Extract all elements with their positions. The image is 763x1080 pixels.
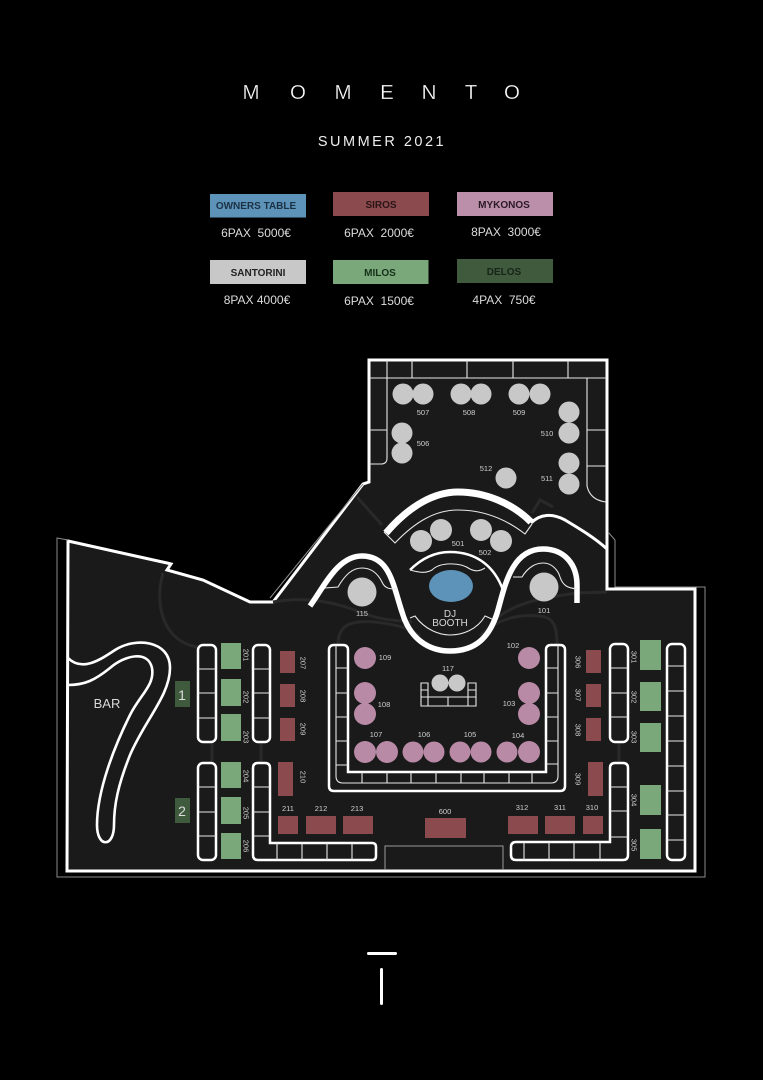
legend: siros: [333, 192, 429, 240]
delos marker 1: [175, 681, 190, 707]
siros table numbers: 209: [298, 723, 308, 735]
siros table numbers: 210: [298, 771, 308, 783]
delos marker 1: 1: [178, 687, 186, 703]
milos table numbers: 303: [630, 731, 638, 743]
siros table numbers: 310: [586, 803, 598, 812]
DJ booth label: BOOTH: [432, 618, 468, 629]
DJ booth label: [432, 609, 468, 629]
santorini table numbers: 115: [356, 609, 368, 618]
milos table numbers: 202: [242, 691, 250, 703]
milos table numbers: 205: [242, 807, 250, 819]
subtitle: SUMMER 2021: [318, 134, 446, 150]
santorini table numbers: 501: [452, 539, 464, 548]
upper room benches: [369, 360, 607, 502]
mykonos table numbers: 108: [378, 700, 390, 709]
booth details: [325, 552, 577, 635]
santorini table numbers: 508: [463, 408, 475, 417]
santorini table numbers: 509: [513, 408, 525, 417]
milos table numbers: 301: [630, 651, 638, 663]
siros table numbers: [282, 656, 598, 816]
sofa 117: [421, 683, 476, 706]
left benches: [198, 645, 376, 860]
siros table numbers: 211: [282, 804, 294, 813]
legend: owners table: [210, 194, 306, 240]
mykonos tables: [354, 647, 540, 763]
icon: logo T: [367, 952, 397, 1005]
entrance: [385, 846, 503, 870]
milos table numbers: [242, 649, 638, 852]
legend: mykonos: MYKONOS: [478, 200, 530, 211]
siros table numbers: 600: [439, 807, 451, 816]
siros table numbers: 208: [298, 690, 308, 702]
santorini table numbers: 510: [541, 429, 553, 438]
milos table numbers: 305: [630, 839, 638, 851]
legend: milos: 6PAX 1500€: [344, 294, 414, 308]
siros table numbers: 213: [351, 804, 363, 813]
mykonos table numbers: 104: [512, 731, 524, 740]
legend: siros: SIROS: [365, 200, 397, 211]
mykonos table numbers: 103: [503, 699, 515, 708]
legend: delos: [457, 259, 553, 307]
siros table numbers: 207: [298, 657, 308, 669]
DJ booth pool: [429, 570, 473, 602]
legend: santorini: SANTORINI: [231, 268, 286, 279]
central U bench: [329, 645, 565, 791]
milos table numbers: 203: [242, 731, 250, 743]
santorini table numbers: 511: [541, 474, 553, 483]
milos tables: [221, 640, 661, 859]
santorini table numbers: 502: [479, 548, 491, 557]
legend: owners table: OWNERS TABLE: [216, 201, 297, 212]
siros table numbers: 307: [574, 689, 582, 701]
legend: siros: 6PAX 2000€: [344, 226, 414, 240]
milos table numbers: 204: [242, 770, 250, 782]
delos marker 2: [175, 798, 190, 823]
floor plan: [57, 360, 705, 877]
mykonos table numbers: 105: [464, 730, 476, 739]
santorini table numbers: 101: [538, 606, 550, 615]
legend: milos: [333, 260, 428, 308]
santorini table numbers: 506: [417, 439, 429, 448]
santorini table numbers: [356, 408, 553, 673]
right benches: [511, 644, 685, 860]
milos table numbers: 302: [630, 691, 638, 703]
DJ booth label: DJ: [444, 609, 456, 620]
legend: mykonos: [457, 192, 553, 239]
legend: mykonos: 8PAX 3000€: [471, 225, 541, 239]
faint floor curves: [160, 497, 619, 762]
curved wall above 501 and 502: [384, 492, 607, 549]
bar counter: [68, 643, 170, 842]
floor outline: [67, 360, 695, 871]
santorini table numbers: 507: [417, 408, 429, 417]
delos marker 2: 2: [178, 803, 186, 819]
wavy DJ wall: [310, 549, 577, 651]
santorini tables: [348, 384, 580, 692]
santorini table numbers: 512: [480, 464, 492, 473]
siros table numbers: 309: [574, 773, 582, 785]
siros table numbers: 308: [574, 724, 582, 736]
milos table numbers: 304: [630, 794, 638, 806]
siros table numbers: 212: [315, 804, 327, 813]
legend: milos: MILOS: [364, 268, 396, 279]
legend: delos: DELOS: [487, 267, 522, 278]
legend: delos: 4PAX 750€: [472, 293, 536, 307]
siros table numbers: 312: [516, 803, 528, 812]
mykonos table numbers: 106: [418, 730, 430, 739]
mykonos table numbers: 102: [507, 641, 519, 650]
siros table numbers: 306: [574, 656, 582, 668]
milos table numbers: 201: [242, 649, 250, 661]
siros table numbers: 311: [554, 803, 566, 812]
siros tables: [278, 650, 603, 838]
mykonos table numbers: [370, 641, 524, 740]
mykonos table numbers: 107: [370, 730, 382, 739]
milos table numbers: 206: [242, 840, 250, 852]
mykonos table numbers: 109: [379, 653, 391, 662]
bar label: BAR: [94, 696, 120, 711]
legend: [210, 192, 553, 308]
santorini table numbers: 117: [442, 664, 454, 673]
legend: santorini: [210, 260, 306, 307]
title: MOMENTO: [242, 81, 520, 104]
legend: santorini: 8PAX 4000€: [224, 293, 291, 307]
outer thin boundary: [57, 484, 705, 877]
legend: owners table: 6PAX 5000€: [221, 226, 291, 240]
